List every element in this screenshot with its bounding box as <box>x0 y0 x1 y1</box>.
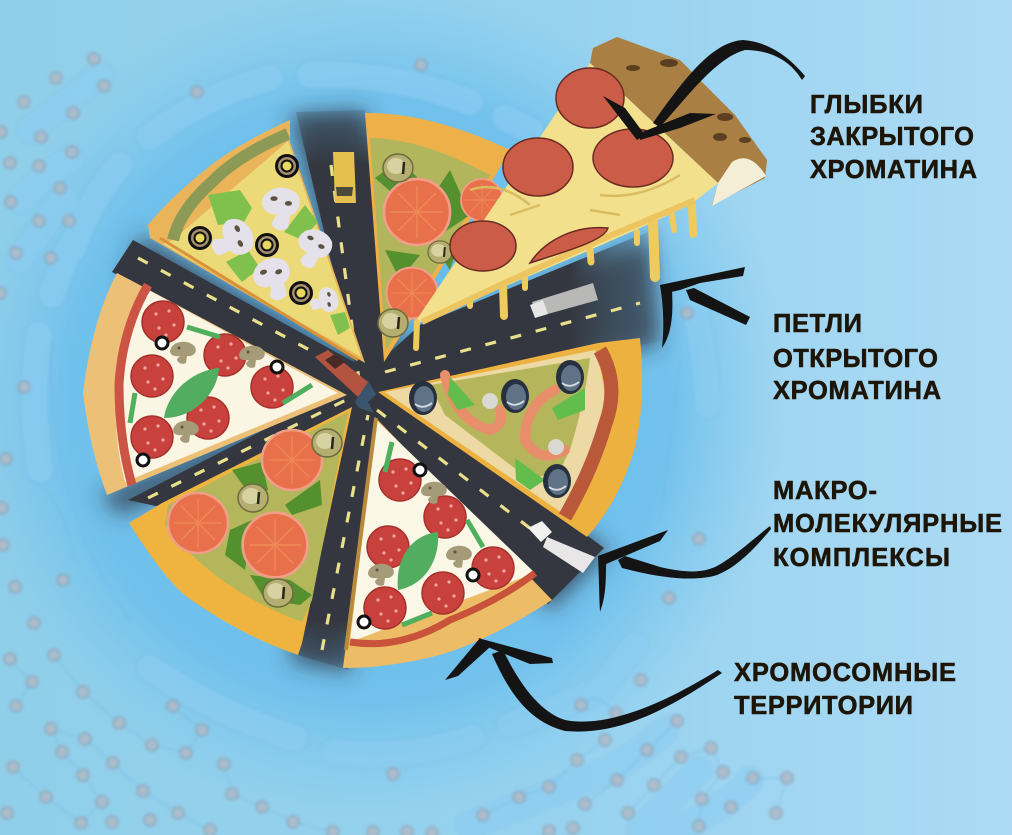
shrimp <box>445 375 565 456</box>
label: closed chromatin clumps: ХРОМАТИНА <box>810 156 977 184</box>
road network <box>112 110 665 670</box>
basil leaf <box>164 368 219 418</box>
lifted pepperoni slice <box>415 37 767 348</box>
truck: white <box>528 521 595 573</box>
olive <box>312 429 342 457</box>
slice: pepperoni and basil, bottom <box>343 417 552 668</box>
crust <box>590 37 767 206</box>
tomato <box>262 430 322 490</box>
olive <box>383 154 413 182</box>
shadow under roads <box>100 110 660 672</box>
cheese <box>415 63 718 322</box>
decorative chromatin background <box>0 52 794 835</box>
road: lower right <box>368 385 604 604</box>
mushrooms <box>204 188 342 318</box>
car: red <box>315 350 368 397</box>
truck: grey <box>530 283 598 318</box>
greens <box>208 190 350 335</box>
label: open chromatin loops: ПЕТЛИ <box>773 310 862 338</box>
label: chromosome territories: ТЕРРИТОРИИ <box>734 692 913 720</box>
arrow: macromolecular complexes <box>598 526 771 612</box>
olive <box>409 381 437 415</box>
label: open chromatin loops: ХРОМАТИНА <box>773 377 941 405</box>
road: top <box>296 110 388 385</box>
label: macromolecular complexes: МОЛЕКУЛЯРНЫЕ <box>773 510 1002 538</box>
label: closed chromatin clumps: ГЛЫБКИ <box>810 91 923 119</box>
cheese drips <box>416 205 693 348</box>
tomato <box>384 179 450 245</box>
label: closed chromatin clumps <box>810 91 977 184</box>
label: open chromatin loops: ОТКРЫТОГО <box>773 345 938 373</box>
chromatin beads <box>0 52 794 835</box>
arrow: closed chromatin <box>603 40 805 140</box>
car: yellow taxi <box>333 152 356 203</box>
label: macromolecular complexes: КОМПЛЕКСЫ <box>773 544 950 572</box>
basil leaf <box>398 532 438 590</box>
slice: mushrooms and olives <box>148 120 365 363</box>
road: upper right <box>365 225 665 398</box>
road: upper left <box>112 240 372 402</box>
label: macromolecular complexes: МАКРО- <box>773 477 877 505</box>
label: open chromatin loops <box>773 310 941 405</box>
label: chromosome territories <box>734 659 956 720</box>
slice: tomatoes and olives, lower left <box>129 407 352 655</box>
road: bottom <box>298 405 380 670</box>
arrow: chromosome territories <box>445 638 722 732</box>
road centre lines <box>138 165 640 650</box>
olive rings <box>188 154 313 305</box>
pepperoni <box>450 68 673 271</box>
pepperoni <box>131 301 293 458</box>
label: chromosome territories: ХРОМОСОМНЫЕ <box>734 659 956 687</box>
slice: pepperoni and basil, left <box>83 273 347 495</box>
label: closed chromatin clumps: ЗАКРЫТОГО <box>810 123 974 151</box>
slice: olives and shrimp, right <box>378 338 642 537</box>
road: left <box>128 388 362 508</box>
slice: tomatoes and olives, top <box>365 113 510 362</box>
label: macromolecular complexes <box>773 477 1002 572</box>
arrow: open chromatin <box>660 267 750 348</box>
pepperoni <box>364 459 514 629</box>
